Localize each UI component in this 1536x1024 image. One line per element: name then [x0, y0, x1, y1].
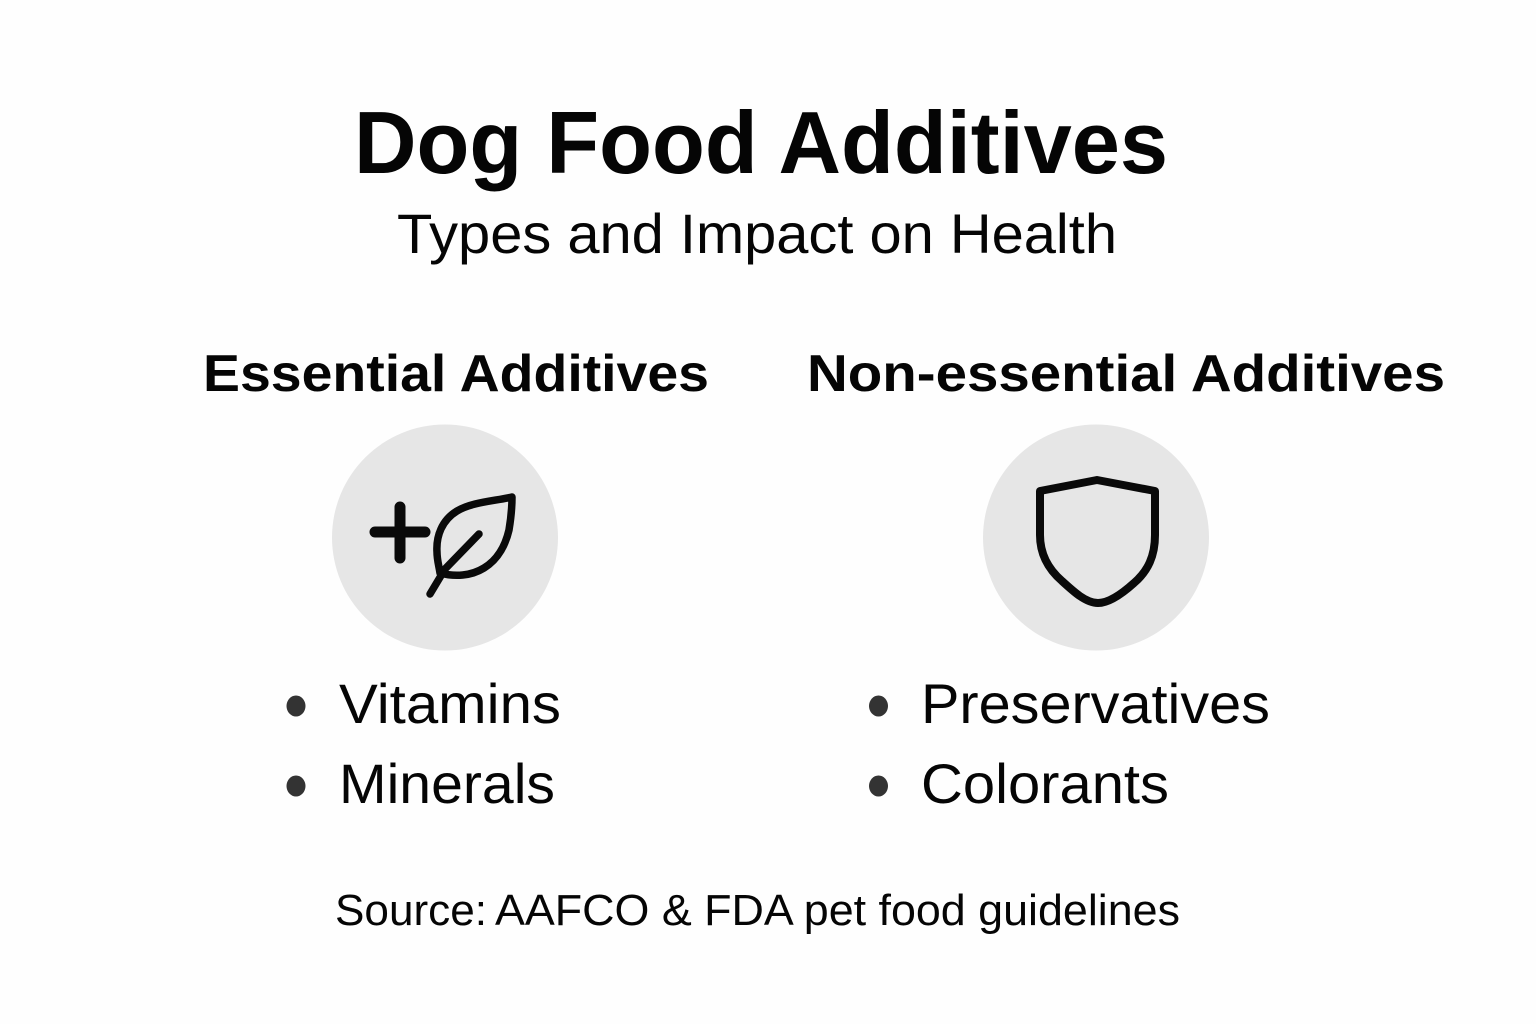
- list: non-essential additives: Colorants: [921, 752, 1169, 815]
- source note: Source:: [335, 886, 487, 935]
- subtitle: Types and Impact on Health: [397, 202, 1117, 265]
- heading: non-essential additives: Non-essential Additives: [807, 345, 1445, 403]
- source note: AAFCO & FDA pet food guidelines: [495, 886, 1180, 935]
- icon: shield: [983, 424, 1209, 650]
- panel: non-essential additives: [807, 345, 1445, 815]
- list: non-essential additives: [869, 672, 1270, 815]
- heading: essential additives: Essential Additives: [203, 345, 709, 403]
- list: essential additives: Minerals: [339, 752, 555, 815]
- icon: plus and leaf: [332, 424, 558, 650]
- title: Dog Food Additives: [354, 93, 1168, 192]
- list: essential additives: Vitamins: [339, 672, 561, 735]
- panel: essential additives: [203, 345, 709, 815]
- list: essential additives: [286, 672, 561, 815]
- list: non-essential additives: Preservatives: [921, 672, 1270, 735]
